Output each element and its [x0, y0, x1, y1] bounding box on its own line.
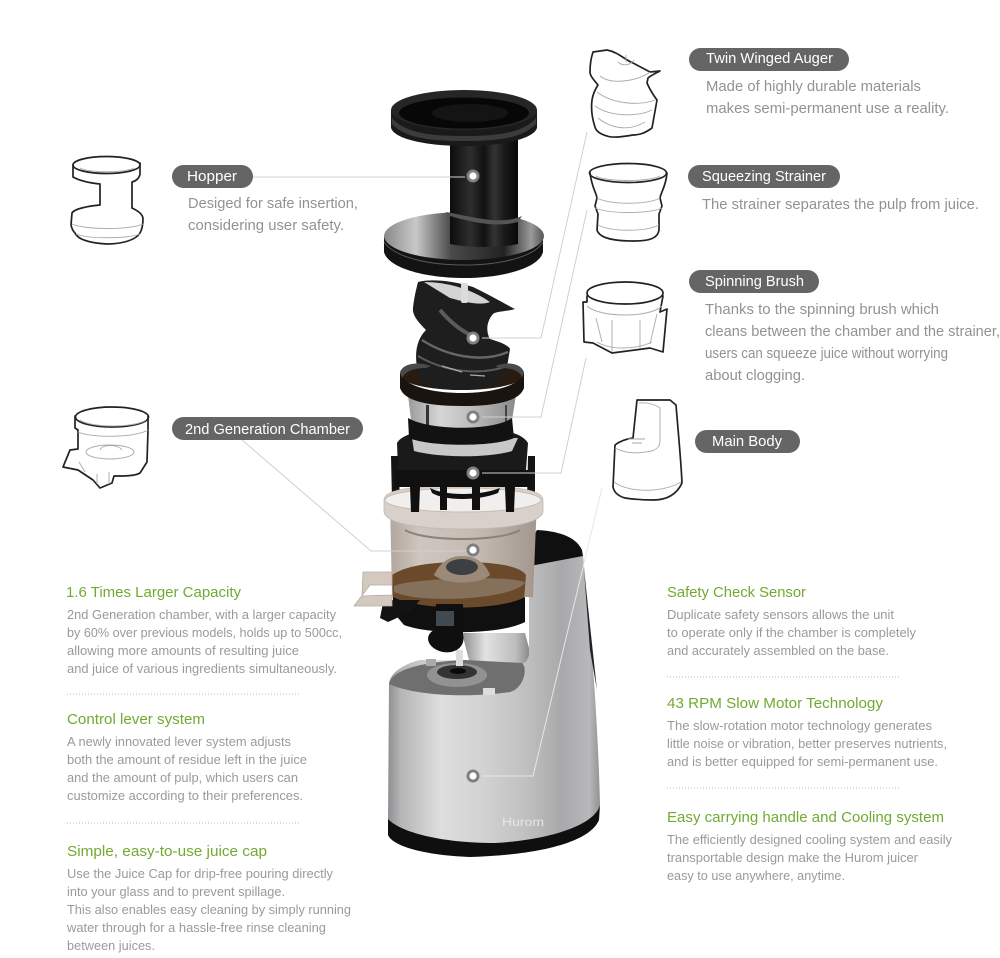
brand wordmark: Hurom [502, 817, 544, 829]
feature: slow motor: little noise or vibration, better preserves nutrients, [667, 737, 947, 751]
brush description: Thanks to the spinning brush which [705, 302, 939, 318]
pill: squeezing strainer: Squeezing Strainer [702, 169, 826, 185]
feature: safety sensor [667, 585, 917, 658]
hopper description: considering user safety. [188, 218, 344, 234]
strainer [400, 364, 524, 429]
feature: capacity: 1.6 Times Larger Capacity [66, 585, 242, 601]
pill: hopper: Hopper [187, 169, 237, 185]
feature: control lever: Control lever system [67, 712, 205, 728]
feature: juice cap: water through for a hassle-free rinse cleaning [66, 921, 326, 935]
pill: spinning brush [689, 270, 819, 293]
auger description: Made of highly durable materials [706, 79, 921, 95]
feature: juice cap: Simple, easy-to-use juice cap [67, 844, 267, 860]
main body [388, 530, 600, 857]
pill: twin winged auger [689, 48, 849, 71]
feature: control lever: and the amount of pulp, which users can [67, 771, 298, 785]
feature: juice cap: into your glass and to prevent spillage. [67, 885, 285, 899]
brush description: cleans between the chamber and the strainer, [705, 324, 1000, 340]
hopper [384, 90, 544, 278]
auger description [706, 79, 949, 117]
feature: handle and cooling [667, 810, 953, 883]
feature: safety sensor: Safety Check Sensor [667, 585, 806, 601]
icon: main body line art [613, 400, 682, 500]
feature: juice cap: between juices. [67, 939, 155, 953]
feature: handle and cooling: transportable design make the Hurom juicer [667, 851, 918, 865]
feature: slow motor: The slow-rotation motor technology generates [667, 719, 932, 733]
brush description: users can squeeze juice without worrying [705, 346, 948, 362]
brush description [705, 302, 1000, 384]
pill: main body: Main Body [712, 434, 783, 450]
feature: control lever: A newly innovated lever system adjusts [67, 735, 291, 749]
feature: capacity [66, 585, 342, 676]
hopper description [188, 196, 358, 234]
pill: squeezing strainer [688, 165, 840, 188]
feature: juice cap [66, 844, 351, 953]
feature: control lever: both the amount of residue left in the juice [67, 753, 307, 767]
pill: 2nd generation chamber [172, 417, 363, 440]
strainer description: The strainer separates the pulp from juice. [702, 197, 979, 213]
feature: control lever: customize according to their preferences. [67, 789, 303, 803]
icon: chamber line art [63, 407, 148, 488]
feature: safety sensor: and accurately assembled on the base. [667, 644, 889, 658]
pill: hopper [172, 165, 253, 188]
leader lines [242, 132, 602, 776]
feature: safety sensor: to operate only if the chamber is completely [667, 626, 917, 640]
feature: handle and cooling: The efficiently designed cooling system and easily [667, 833, 953, 847]
brush description: about clogging. [705, 368, 805, 384]
feature: capacity: 2nd Generation chamber, with a larger capacity [67, 608, 337, 622]
pill: 2nd generation chamber: 2nd Generation Chamber [185, 422, 350, 438]
chamber [354, 486, 543, 652]
juicer photo: exploded view [354, 90, 600, 857]
feature: juice cap: Use the Juice Cap for drip-free pouring directly [67, 867, 334, 881]
icon: hopper line art [71, 156, 143, 244]
auger description: makes semi-permanent use a reality. [706, 101, 949, 117]
icon: auger line art [590, 50, 660, 137]
pill: twin winged auger: Twin Winged Auger [706, 51, 833, 67]
feature: slow motor: and is better equipped for semi-permanent use. [667, 755, 938, 769]
callout dots [466, 170, 480, 782]
feature: handle and cooling: Easy carrying handle and Cooling system [667, 810, 944, 826]
feature: slow motor: 43 RPM Slow Motor Technology [667, 696, 884, 712]
pill: spinning brush: Spinning Brush [705, 274, 804, 290]
feature: juice cap: This also enables easy cleaning by simply running [67, 903, 351, 917]
strainer back rim [400, 360, 524, 390]
feature: safety sensor: Duplicate safety sensors allows the unit [667, 608, 895, 622]
hopper description: Desiged for safe insertion, [188, 196, 358, 212]
feature: capacity: and juice of various ingredients simultaneously. [67, 662, 337, 676]
icon: strainer line art [590, 164, 667, 241]
auger [413, 280, 515, 390]
feature: slow motor [667, 696, 947, 769]
icon: spinning brush line art [583, 282, 667, 353]
feature: control lever [67, 712, 307, 803]
feature: capacity: allowing more amounts of resulting juice [67, 644, 299, 658]
feature: handle and cooling: easy to use anywhere, anytime. [667, 869, 845, 883]
pill: main body [695, 430, 800, 453]
spinning brush [391, 418, 535, 500]
feature: capacity: by 60% over previous models, holds up to 500cc, [67, 626, 342, 640]
brush frame legs [395, 470, 530, 512]
